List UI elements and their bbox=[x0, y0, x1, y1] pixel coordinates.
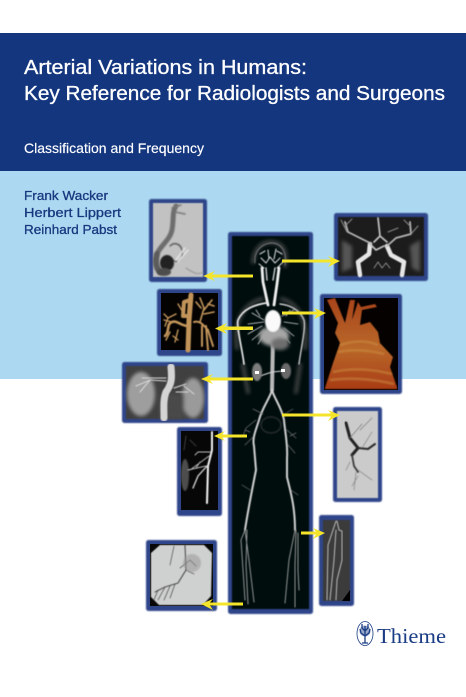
title bbox=[24, 57, 445, 105]
arrow: to pulmonary vessels bbox=[215, 323, 253, 334]
arrow: to lower leg arteries bbox=[301, 528, 325, 539]
panel: 3D pulmonary vessels bbox=[157, 289, 222, 356]
subtitle: Classification and Frequency bbox=[24, 140, 204, 156]
panel: renal arteries CT bbox=[122, 362, 208, 423]
panel: whole body angiogram bbox=[228, 232, 313, 614]
authors: Reinhard Pabst bbox=[24, 222, 117, 237]
authors: Herbert Lippert bbox=[24, 205, 121, 220]
arrows bbox=[201, 256, 340, 610]
icon: tree emblem bbox=[357, 622, 373, 646]
title: Arterial Variations in Humans: bbox=[24, 57, 307, 79]
arrow: to renal arteries bbox=[201, 374, 253, 384]
authors: Frank Wacker bbox=[24, 188, 109, 203]
arrow: to 3D aortic arch bbox=[282, 308, 326, 319]
arrow: to pelvic arteries bbox=[282, 410, 340, 421]
arrow: to aortic arch angiogram bbox=[203, 271, 253, 281]
title: Key Reference for Radiologists and Surgeons bbox=[24, 83, 445, 105]
panel: foot angiogram bbox=[146, 540, 217, 611]
arrow: to foot angiogram bbox=[201, 599, 243, 610]
panel: aortic arch angiogram bbox=[149, 199, 207, 282]
panel: thigh arteries bbox=[177, 427, 222, 516]
authors bbox=[24, 188, 121, 237]
arrow: to thigh arteries bbox=[214, 431, 247, 441]
panel: pelvic arteries bbox=[333, 407, 382, 502]
publisher logo bbox=[357, 622, 446, 648]
arrow: to cerebral arteries bbox=[282, 256, 340, 267]
panel: 3D aortic arch bbox=[320, 294, 402, 394]
title banner bbox=[0, 33, 466, 171]
wordmark: Thieme bbox=[377, 624, 446, 648]
panel: cerebral arteries bbox=[334, 213, 428, 281]
panel: lower leg arteries bbox=[319, 515, 354, 606]
